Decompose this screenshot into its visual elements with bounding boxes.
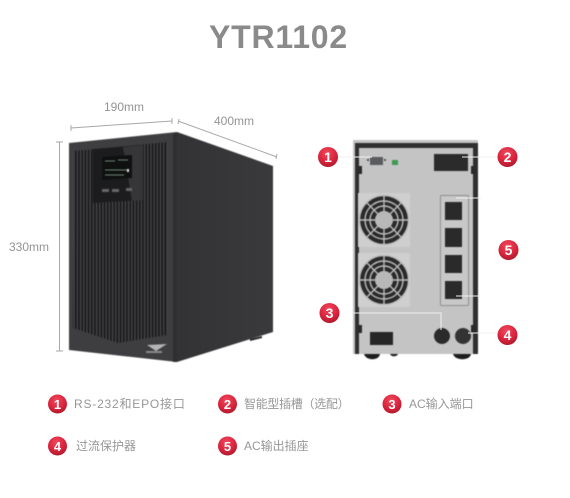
- marker 1: 1: [324, 149, 332, 165]
- legend item 4: [48, 436, 136, 456]
- leader lines: [336, 157, 498, 333]
- fan 2: [358, 253, 410, 307]
- marker 3: [320, 303, 340, 323]
- legend item 5: [218, 436, 309, 456]
- product: UPS front view: [69, 132, 273, 362]
- EPO connector: [392, 160, 398, 165]
- serial port: [367, 157, 386, 165]
- legend item 1: 1: [54, 397, 61, 412]
- legend item 5: AC输出插座: [244, 438, 309, 453]
- rear body: [353, 140, 478, 354]
- legend item 1: [48, 394, 186, 414]
- smart slot: [434, 154, 468, 171]
- outlet group: [440, 196, 468, 306]
- legend item 2: [218, 394, 349, 414]
- marker 1: [318, 147, 338, 167]
- logo: [146, 344, 167, 353]
- marker 2: 2: [504, 149, 512, 165]
- display screen: [102, 155, 132, 180]
- marker 3: 3: [326, 305, 334, 321]
- dimension: depth 400mm: [178, 114, 277, 159]
- legend item 2: 智能型插槽（选配）: [244, 396, 349, 411]
- front frame: [69, 132, 177, 362]
- legend item 4: 过流保护器: [76, 439, 136, 453]
- marker 2: [498, 147, 518, 167]
- breaker: [455, 328, 471, 344]
- legend item 5: 5: [224, 439, 231, 454]
- legend item 3: AC输入端口: [409, 396, 474, 411]
- side panel: [177, 132, 273, 362]
- dimension: width 190mm: [71, 100, 172, 131]
- legend item 2: 2: [224, 397, 231, 412]
- marker 5: [498, 240, 518, 260]
- AC input gland: [434, 328, 450, 344]
- marker 5: 5: [505, 242, 513, 258]
- title: YTR1102: [209, 19, 348, 55]
- legend item 3: 3: [388, 397, 396, 412]
- dimension: height 330mm: 330mm: [9, 240, 49, 254]
- vent panel: [73, 142, 167, 343]
- marker 4: [498, 325, 518, 345]
- dimension: width 190mm: 190mm: [104, 100, 144, 114]
- feet: [250, 336, 262, 341]
- marker 4: 4: [504, 327, 512, 343]
- center seam: [173, 133, 177, 362]
- legend item 4: 4: [54, 439, 62, 454]
- legend item 1: RS-232和EPO接口: [74, 396, 186, 411]
- product: UPS rear view: [353, 140, 478, 359]
- legend item 3: [382, 394, 474, 414]
- fan 1: [358, 193, 410, 247]
- feet: [364, 354, 471, 359]
- dimension: depth 400mm: 400mm: [214, 114, 254, 128]
- AC inlet: [370, 332, 393, 345]
- display panel: [93, 145, 143, 203]
- side clips: [358, 166, 476, 333]
- display buttons: [102, 188, 132, 192]
- dimension: height 330mm: [9, 142, 63, 351]
